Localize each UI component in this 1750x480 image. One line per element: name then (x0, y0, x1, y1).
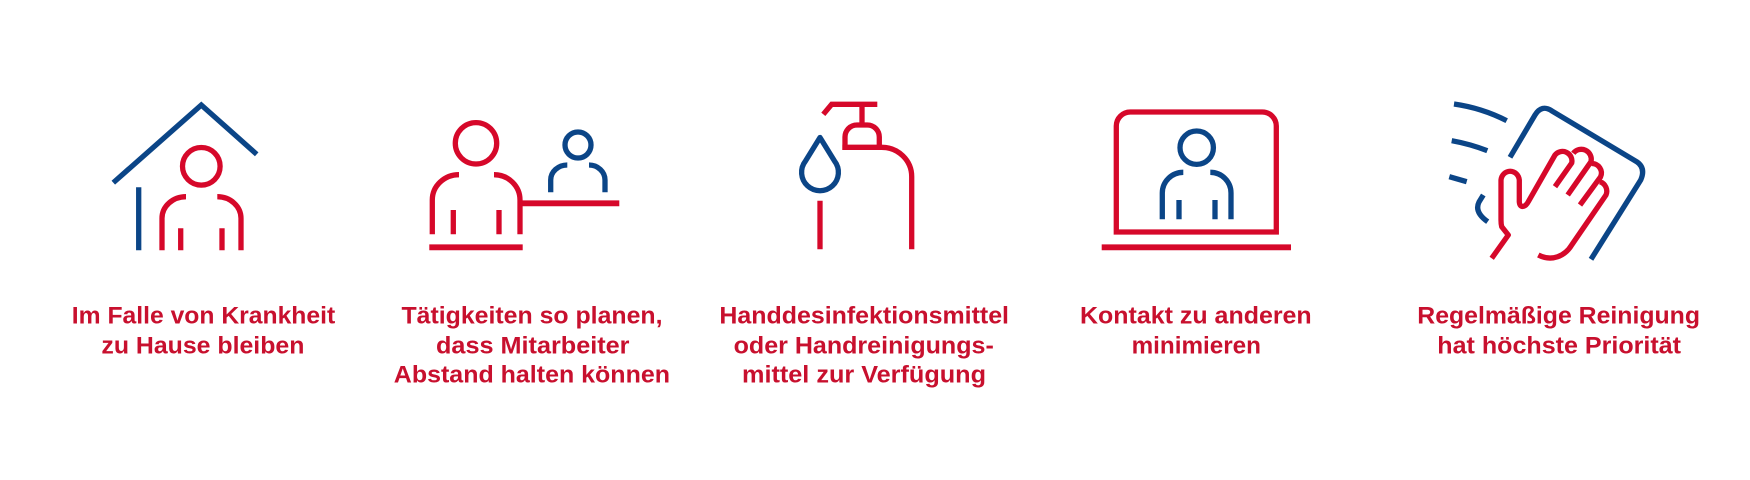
caption: keep distance: dass Mitarbeiter (436, 332, 630, 359)
icon: hand wiping with cloth (1449, 104, 1643, 259)
panel: regular cleaning (1417, 104, 1700, 359)
caption: hand sanitizer (719, 302, 1009, 389)
icon: two people at a distance (429, 123, 619, 247)
icon: person on laptop (1102, 112, 1291, 247)
caption: regular cleaning: hat höchste Priorität (1437, 332, 1681, 359)
caption: keep distance (394, 302, 670, 389)
caption: stay home (72, 302, 335, 359)
panel: stay home when sick (72, 105, 335, 359)
caption: stay home: Im Falle von Krankheit (72, 302, 335, 329)
caption: keep distance: Abstand halten können (394, 362, 670, 389)
caption: stay home: zu Hause bleiben (101, 332, 304, 359)
caption: regular cleaning (1417, 302, 1700, 359)
caption: hand sanitizer: oder Handreinigungs- (734, 332, 994, 359)
panel: keep distance (394, 123, 670, 389)
panel: minimize contact (1080, 112, 1312, 359)
caption: minimize contact: Kontakt zu anderen (1080, 302, 1312, 329)
caption: minimize contact: minimieren (1132, 332, 1261, 359)
caption: hand sanitizer: Handdesinfektionsmittel (719, 302, 1009, 329)
panel: hand sanitizer (719, 104, 1009, 389)
caption: minimize contact (1080, 302, 1312, 359)
caption: keep distance: Tätigkeiten so planen, (402, 302, 662, 329)
icon: person in house (113, 105, 257, 250)
icon: soap dispenser with drop (802, 104, 912, 249)
caption: regular cleaning: Regelmäßige Reinigung (1417, 302, 1700, 329)
caption: hand sanitizer: mittel zur Verfügung (742, 362, 986, 389)
